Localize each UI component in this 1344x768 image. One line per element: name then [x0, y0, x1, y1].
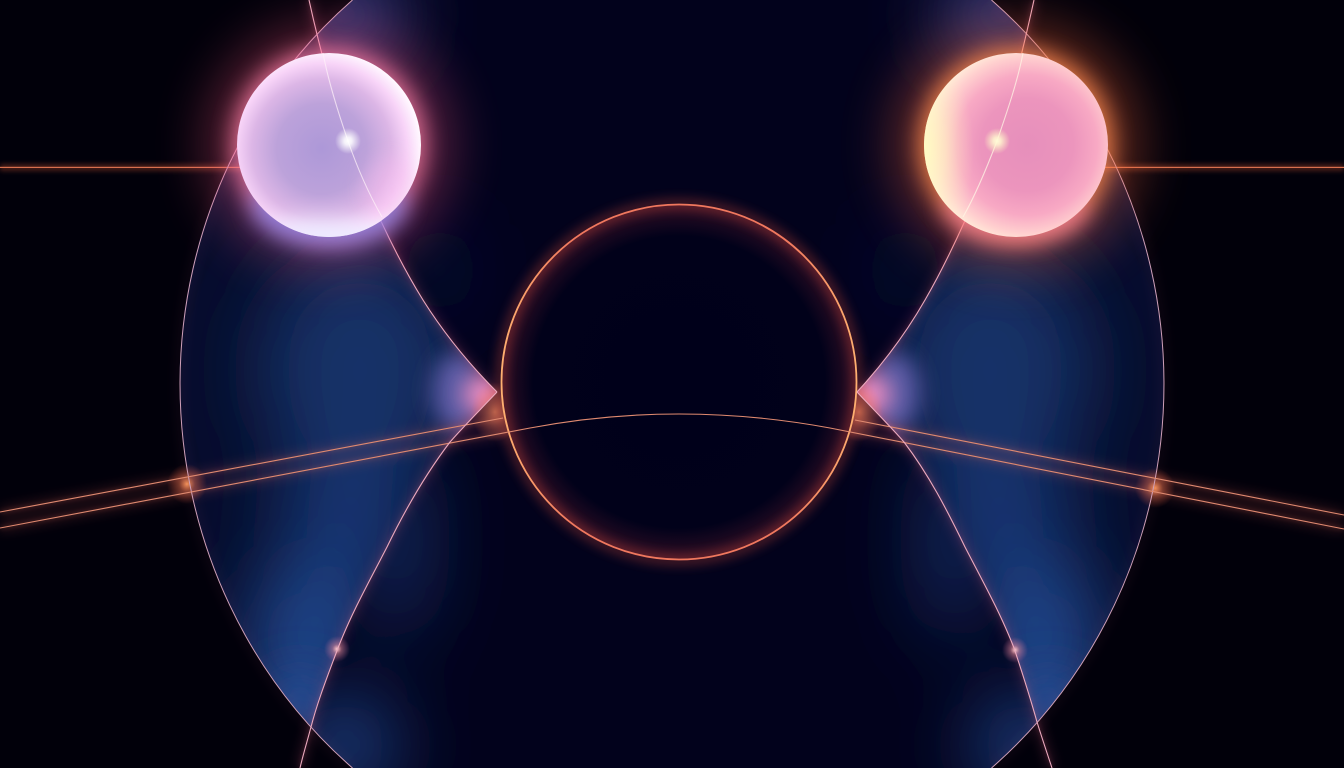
soft blue wedges inside the big circle: [290, 0, 1075, 768]
big circle fill: [180, 0, 1164, 768]
left orb: [204, 20, 454, 270]
central ring: [501, 204, 857, 560]
horizontal orange beams: [0, 164, 1344, 171]
blue glow region: right: [858, 34, 1164, 722]
right orb: [870, 20, 1141, 270]
junction flares: [167, 382, 1175, 663]
blue glow region: left: [180, 34, 496, 726]
